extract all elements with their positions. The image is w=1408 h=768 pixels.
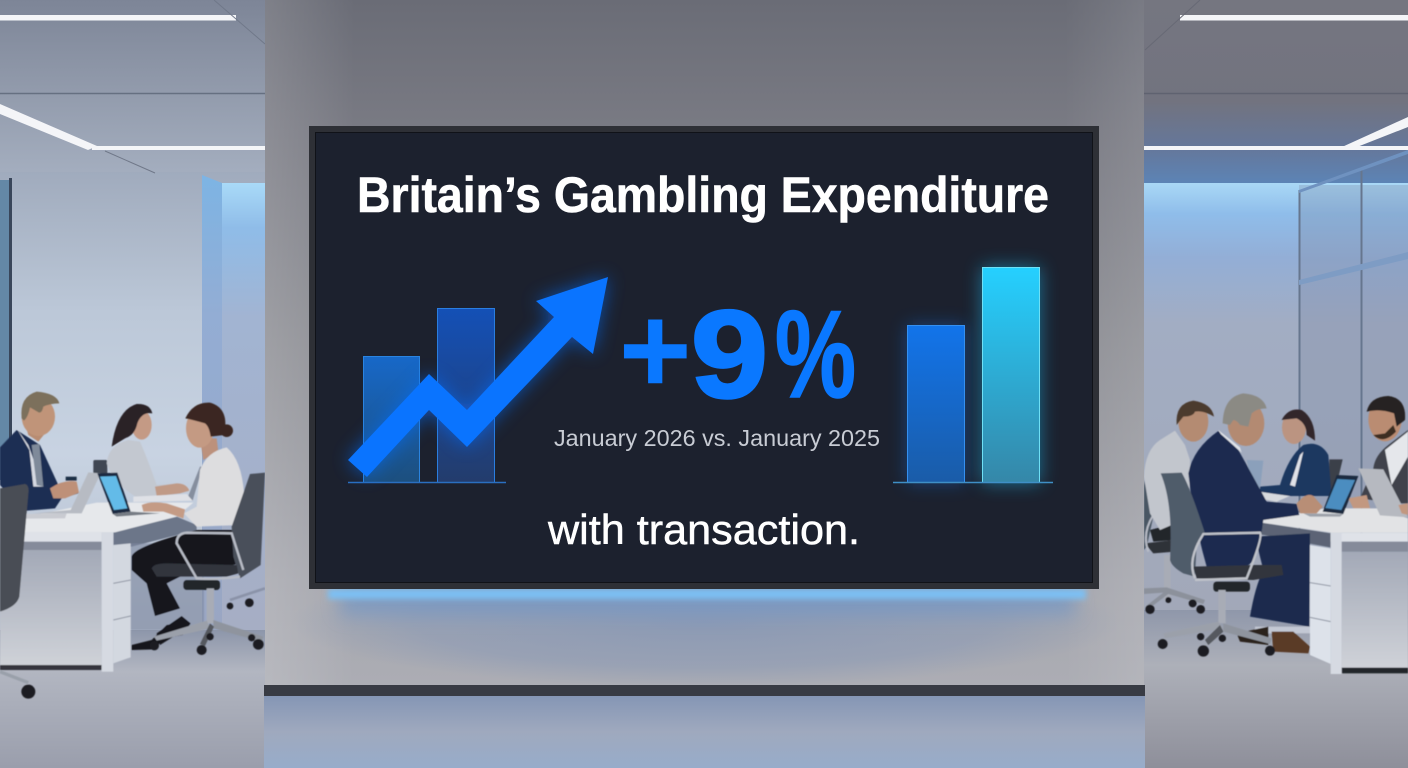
worker: man in navy suit: [0, 392, 79, 511]
comparison period: January 2026 vs. January 2025: [554, 425, 880, 451]
worker: man in navy suit: [1188, 393, 1323, 653]
chair: foreground left: [0, 484, 35, 699]
laptops on desk: [1303, 468, 1408, 517]
desk: [0, 503, 204, 672]
screen: [309, 126, 1099, 589]
right office background: [1144, 0, 1408, 768]
right desk and workers: [1144, 393, 1408, 674]
laptops on desk: [22, 472, 160, 519]
big percentage: %: [775, 286, 856, 424]
worker: woman at back desk: [93, 404, 203, 502]
right bar chart: [893, 267, 1053, 483]
screen under-glow: [328, 589, 1086, 615]
left bar chart with arrow: [348, 277, 608, 482]
title: Britain’s Gambling Expenditure: [357, 167, 1049, 223]
caption: with transaction.: [547, 506, 860, 553]
big percentage: +: [619, 282, 691, 420]
central wall: [265, 0, 1144, 700]
big percentage: 9: [691, 286, 768, 424]
left desk and workers: [0, 392, 265, 699]
icon: rising arrow glow: [348, 277, 608, 477]
worker: man with beard: [1348, 396, 1408, 508]
chair: front right: [150, 473, 265, 655]
wall base strip: [264, 685, 1145, 696]
floor under wall: [264, 696, 1145, 768]
chair: front: [1158, 473, 1283, 657]
desk: [1255, 508, 1408, 674]
icon: rising arrow: [348, 277, 608, 477]
worker: woman at laptop: [132, 403, 244, 650]
worker: man in light shirt and chair: [1144, 401, 1214, 614]
left office background: [0, 0, 265, 768]
worker: woman in navy: [1247, 410, 1343, 502]
